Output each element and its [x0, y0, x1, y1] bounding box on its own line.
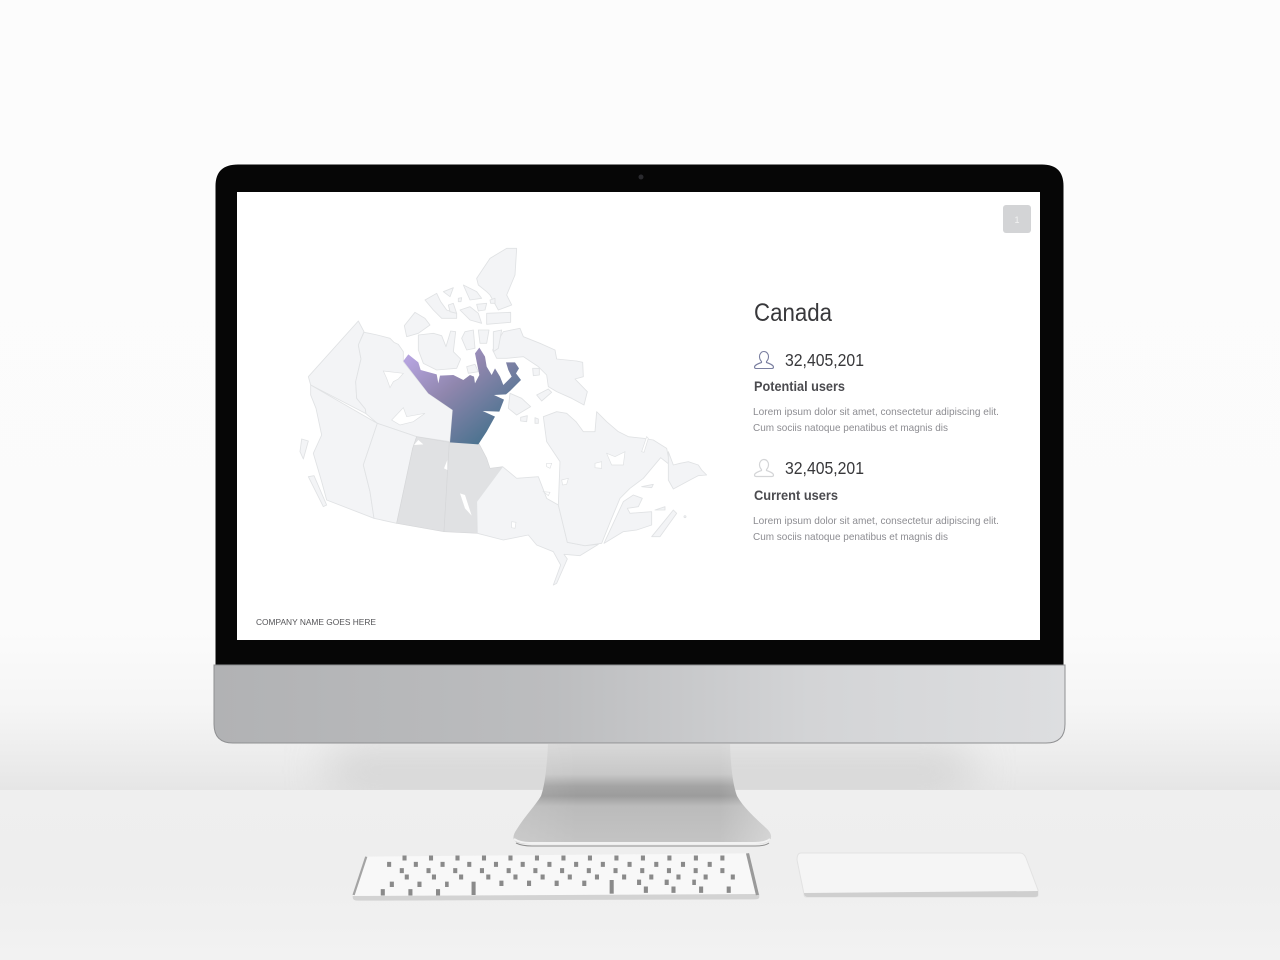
page number badge: 1 — [1014, 215, 1020, 225]
description: Cum sociis natoque penatibus et magnis dis — [753, 422, 948, 434]
icon: user outline colored — [754, 352, 774, 368]
monitor stand — [513, 744, 771, 846]
description — [753, 515, 999, 543]
Banks Island — [404, 312, 430, 337]
Southampton Island — [508, 393, 531, 415]
Lake Winnipeg — [460, 493, 472, 516]
page number badge — [1003, 205, 1031, 233]
Prince of Wales Island — [462, 330, 475, 350]
footer company name: COMPANY NAME GOES HERE — [256, 617, 376, 627]
trackpad — [797, 853, 1038, 897]
description — [753, 406, 999, 434]
title: Canada — [754, 299, 832, 327]
gulf islands — [642, 484, 653, 488]
Northwest Territories — [356, 332, 453, 442]
Quebec and Labrador — [543, 412, 670, 546]
monitor shadow on wall — [330, 745, 970, 795]
Nunavut highlighted region — [403, 348, 521, 444]
Somerset Island — [478, 330, 489, 343]
Lake Athabasca — [414, 440, 423, 445]
icon: user outline grey — [754, 460, 774, 476]
label: Current users — [754, 487, 838, 503]
Vancouver Island — [308, 476, 327, 507]
Haida Gwaii — [300, 439, 308, 459]
Alberta — [363, 423, 417, 523]
map of Canada — [300, 248, 707, 585]
Great Bear Lake — [383, 371, 403, 388]
monitor chin — [214, 665, 1065, 743]
keyboard — [353, 853, 759, 901]
New Brunswick and Gaspe — [604, 495, 652, 543]
Nova Scotia — [652, 510, 677, 537]
Queen Elizabeth islets — [443, 285, 495, 323]
Ontario — [477, 467, 598, 585]
Melville Island — [425, 293, 457, 318]
description: Lorem ipsum dolor sit amet, consectetur adipiscing elit. — [753, 406, 999, 418]
desk surface — [0, 790, 1280, 960]
Saskatchewan — [397, 437, 449, 532]
small inland lakes — [512, 522, 516, 528]
Victoria Island — [418, 331, 461, 370]
British Columbia — [311, 385, 377, 518]
Ellesmere Island — [477, 248, 517, 310]
monitor body — [214, 164, 1065, 743]
screen — [237, 192, 1040, 640]
Newfoundland — [668, 452, 707, 489]
monitor bezel — [215, 164, 1064, 665]
King William area — [467, 364, 478, 373]
Great Slave Lake — [392, 408, 425, 425]
Baffin Island — [493, 328, 587, 405]
label: Potential users — [754, 378, 845, 394]
Foxe Basin islands — [533, 368, 539, 376]
description: Cum sociis natoque penatibus et magnis dis — [753, 531, 948, 543]
Devon Island — [487, 312, 511, 324]
Yukon — [308, 321, 366, 414]
stat block: potential users — [753, 350, 999, 434]
description: Lorem ipsum dolor sit amet, consectetur adipiscing elit. — [753, 515, 999, 527]
value: 32,405,201 — [785, 350, 864, 370]
Manitoba — [444, 442, 503, 533]
stat block: current users — [753, 458, 999, 543]
webcam — [638, 174, 644, 180]
value: 32,405,201 — [785, 458, 864, 478]
